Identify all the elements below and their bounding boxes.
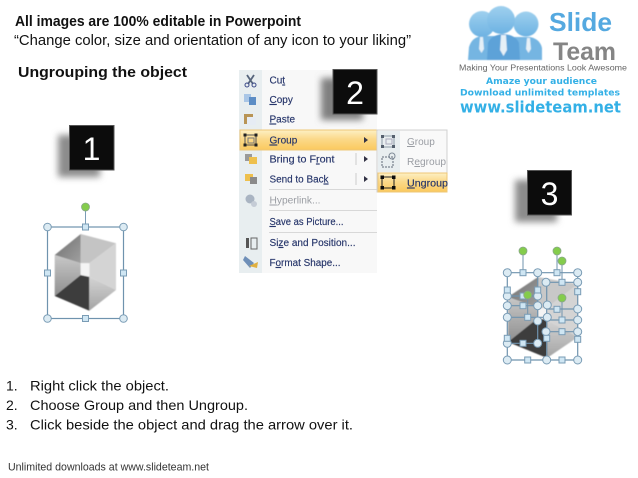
menu highlight: Group [240,130,377,150]
submenu items: Regroup [407,157,446,168]
menu items: Cut [270,76,285,86]
submenu [377,130,448,192]
square handles [504,270,581,363]
menu items: Bring to F ront [270,154,335,166]
submenu items: Ungroup [407,178,448,190]
heading: editable note: “Change color, size and orientation of any icon to your liking” [14,33,411,49]
cube: step 3 ungrouped with selection handles [503,247,582,364]
submenu highlight: Ungroup [378,173,447,192]
menu icon column [239,70,262,273]
menu items [270,76,356,269]
menu items: Paste [270,114,296,126]
round handles [503,269,582,364]
instructions list: 3. [6,416,18,432]
logo: SlideTeam [459,6,627,116]
heading: editable note: All images are 100% editable in Powerpoint [15,14,301,30]
green rotation handles [519,247,566,302]
submenu items: Group [407,137,435,148]
badge: step 3: 3 [541,176,558,212]
promo text: www.slideteam.net [460,98,621,116]
badge: step 3 [515,170,572,222]
submenu items [407,137,448,190]
instructions list: Choose Group and then Ungroup. [30,397,248,413]
menu items: Size and Position... [270,238,356,249]
logo word: Slide: Slide [549,7,612,37]
cube [55,234,116,311]
cube [508,277,578,358]
menu items: Copy [270,95,293,106]
menu items: Hyperlink... [270,196,320,206]
instructions list: Click beside the object and drag the arrow over it. [30,416,353,432]
instructions list: 1. [6,378,18,394]
instructions list: Right click the object. [30,378,169,394]
heading: ungrouping the object: Ungrouping the object [18,64,187,81]
badge: step 1 [58,126,114,177]
cube: step 1 with selection frame [44,203,127,322]
menu icons [243,75,258,268]
menu items: Group [270,136,298,146]
promo text: Amaze your audience [486,77,597,87]
instructions list: 2. [6,397,18,413]
instructions list [6,378,353,432]
menu items: Save as Picture... [270,217,344,228]
badge: step 1: 1 [83,131,100,167]
selection frame [44,203,127,322]
submenu icon column [378,131,400,172]
logo tagline: Making Your Presentations Look Awesome [459,62,627,72]
menu items: Send to Back [270,174,329,186]
icon: three people [468,6,542,60]
heading: editable note [14,14,411,49]
menu separators and arrows [269,137,377,232]
selection frames [507,251,578,360]
logo word: Team: Team [553,38,616,66]
context menu screenshot [239,70,377,273]
menu items: Format Shape... [270,258,340,269]
footer: Unlimited downloads at www.slideteam.net [8,462,209,474]
promo text: Download unlimited templates [460,88,620,98]
submenu icons [380,135,396,190]
badge: step 2 [321,70,377,120]
promo text [460,77,621,116]
badge: step 2: 2 [346,75,364,111]
